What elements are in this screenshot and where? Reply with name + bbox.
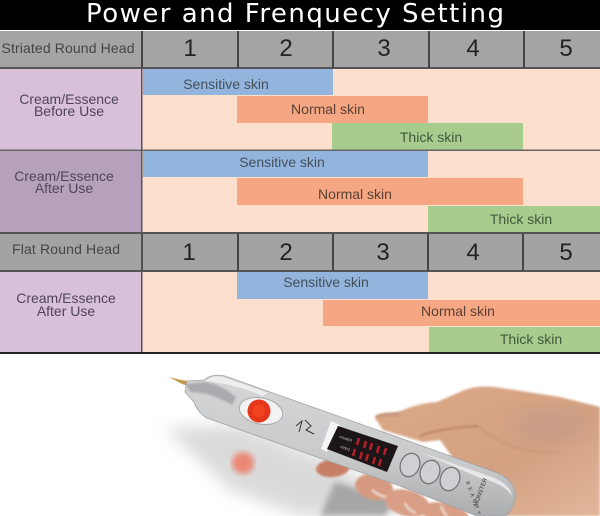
bar: thick skin, levels 3-4 xyxy=(332,123,523,150)
pen needle tip xyxy=(169,377,188,386)
LED display xyxy=(327,426,398,472)
lower fingers xyxy=(315,457,471,516)
header row: striated round head: 2 xyxy=(279,35,293,62)
red power button xyxy=(237,394,285,428)
brand text on pen xyxy=(464,477,489,516)
bar: thick skin, levels 4-5: Thick skin xyxy=(500,331,562,347)
bar: sensitive skin, levels 1-3 xyxy=(143,151,428,177)
settings table xyxy=(0,31,600,354)
row label: cream before use: Before Use xyxy=(34,103,104,119)
control buttons xyxy=(397,450,463,494)
header row: flat round head: 3 xyxy=(376,239,390,266)
header row: striated round head: Striated Round Head xyxy=(2,40,134,56)
bar: normal skin, levels 2-3 xyxy=(237,96,428,123)
row label: cream after use xyxy=(0,151,141,232)
brand text on pen: MONSTER xyxy=(473,477,489,508)
bar: sensitive skin, levels 1-3: Sensitive skin xyxy=(239,154,325,170)
table background xyxy=(142,68,600,353)
LED display: POWER xyxy=(339,435,353,443)
header row: striated round head: 5 xyxy=(559,35,573,62)
header row: striated round head xyxy=(0,31,600,69)
row label: cream after use, flat head: Cream/Essence xyxy=(16,290,116,306)
header row: flat round head: Flat Round Head xyxy=(12,241,120,257)
header row: flat round head xyxy=(0,232,600,272)
bar: thick skin, levels 4-5 xyxy=(428,206,600,232)
pen body xyxy=(185,375,515,516)
header row: striated round head: 4 xyxy=(466,35,480,62)
bar: normal skin, levels 2-4: Normal skin xyxy=(318,186,392,202)
bar: thick skin, levels 3-4: Thick skin xyxy=(400,129,462,145)
thumb nail and palm crease xyxy=(376,414,560,452)
bar: sensitive skin, levels 2-3 xyxy=(237,272,428,299)
header row: flat round head: 5 xyxy=(559,239,573,266)
title bar xyxy=(0,0,600,30)
row label: cream after use: Cream/Essence xyxy=(14,168,114,184)
bar: normal skin, levels 2-4 xyxy=(237,178,523,205)
row label: cream after use: After Use xyxy=(35,180,93,196)
back-of-hand shading xyxy=(512,407,588,443)
bar: normal skin, levels 3-5 xyxy=(323,300,600,326)
bar: normal skin, levels 2-3: Normal skin xyxy=(291,101,365,117)
bar: normal skin, levels 3-5: Normal skin xyxy=(421,303,495,319)
product photo: pen device held in hand xyxy=(165,375,600,516)
pen top highlight xyxy=(205,377,268,396)
header row: flat round head: 1 xyxy=(182,239,196,266)
pen head wedge xyxy=(186,382,236,405)
bar: thick skin, levels 4-5 xyxy=(429,327,600,352)
pen reflection shadow xyxy=(165,425,400,516)
row label: cream before use: Cream/Essence xyxy=(19,91,119,107)
header row: flat round head: 4 xyxy=(466,239,480,266)
brand logo xyxy=(296,420,314,434)
bar: sensitive skin, levels 1-2 xyxy=(143,69,333,95)
bar: sensitive skin, levels 1-2: Sensitive skin xyxy=(183,76,269,92)
row label: cream before use xyxy=(0,69,141,150)
bar: thick skin, levels 4-5: Thick skin xyxy=(490,211,552,227)
pen right end highlight xyxy=(420,452,512,496)
LED display: FREQ xyxy=(340,445,350,452)
header row: flat round head: 2 xyxy=(279,239,293,266)
bar: sensitive skin, levels 2-3: Sensitive skin xyxy=(283,274,369,290)
row label: cream after use, flat head: After Use xyxy=(37,303,95,319)
header row: striated round head: 1 xyxy=(183,35,197,62)
display bezel xyxy=(321,421,340,452)
hand palm and thumb xyxy=(375,386,600,516)
header row: striated round head: 3 xyxy=(377,35,391,62)
row label: cream after use, flat head xyxy=(0,272,141,352)
